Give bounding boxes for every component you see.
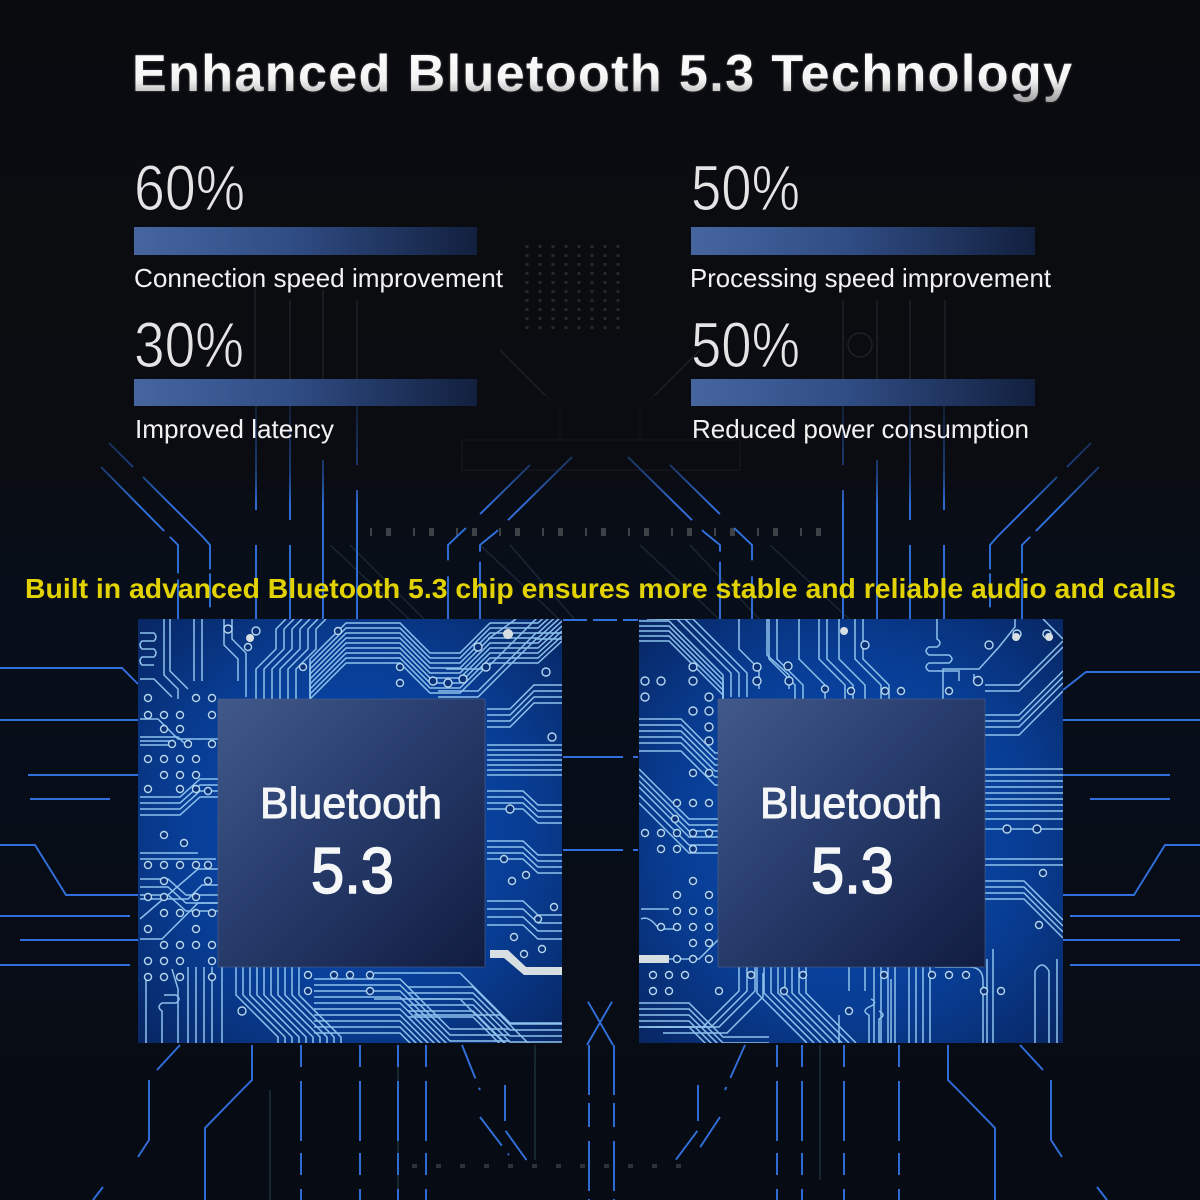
chip left: 5.3 [311,834,394,907]
dim overlay fading upper circuit lines [0,395,1200,505]
panel: left Bluetooth chip board [138,601,610,1083]
stat: connection speed: 60% [134,152,245,224]
stat: processing speed: Processing speed improvement [690,263,1052,293]
circuit traces left [140,601,610,1083]
chip right [718,699,985,967]
bright solder pads left [246,629,562,975]
vias right [641,630,1051,1014]
title: Enhanced Bluetooth 5.3 Technology [132,45,1072,103]
circuit traces right [639,619,1063,1061]
stat: latency: Improved latency [135,414,334,444]
stat: power consumption: Reduced power consumption [692,414,1029,444]
stat: connection speed: Connection speed improvement [134,263,504,293]
stat: processing speed: 50% [691,152,800,224]
stat: latency: 30% [134,309,244,381]
stat: power consumption: 50% [691,309,800,381]
vias left [144,625,558,1015]
chip left: Bluetooth [260,779,442,828]
stat: power consumption [691,309,1035,444]
stat: connection speed [134,152,504,293]
bright solder pads right [639,627,1053,963]
chip right: 5.3 [811,834,894,907]
stat: latency [134,309,477,444]
panel: right Bluetooth chip board [639,619,1063,1061]
blue circuit lines [0,400,1200,1200]
chip right: Bluetooth [760,779,942,828]
faint circuit background [255,245,945,1200]
yellow caption: Built in advanced Bluetooth 5.3 chip ensures more stable and reliable audio and calls [25,573,1176,604]
stat: processing speed [690,152,1052,293]
chip left [218,699,485,967]
